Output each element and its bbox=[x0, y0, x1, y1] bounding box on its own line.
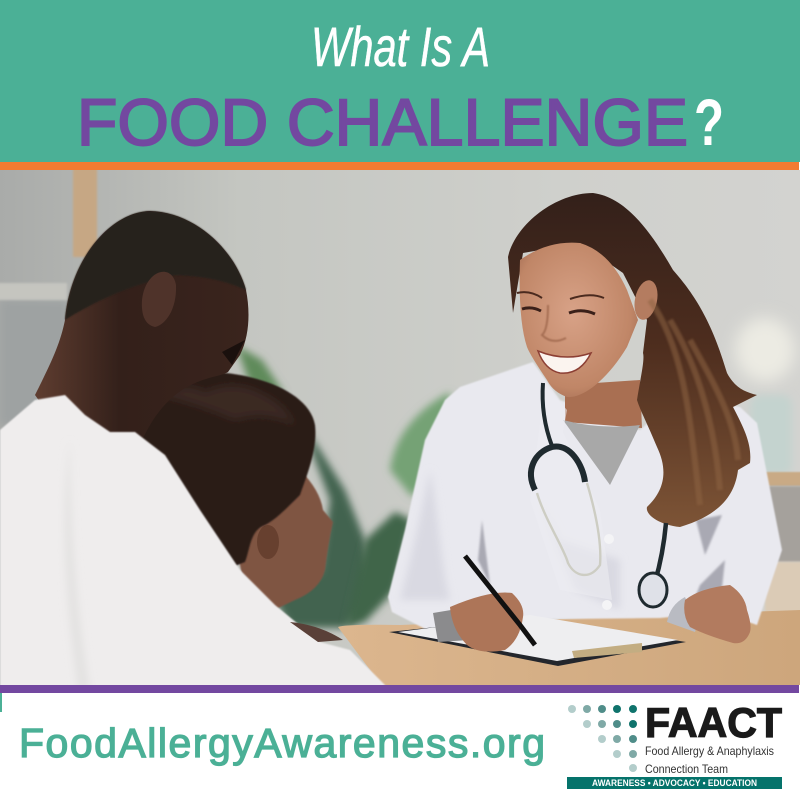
coat buttons bbox=[604, 534, 614, 544]
eye bbox=[222, 340, 245, 365]
short hair bbox=[65, 211, 246, 320]
grey undershirt bbox=[563, 420, 640, 485]
table bbox=[338, 610, 800, 690]
neck bbox=[565, 380, 642, 428]
logo name line 1: Food Allergy & Anaphylaxis bbox=[645, 744, 774, 758]
FAACT logo bbox=[567, 699, 782, 789]
smile bbox=[538, 351, 591, 373]
stethoscope bbox=[531, 383, 667, 607]
child bbox=[135, 372, 333, 612]
blurred room background bbox=[0, 165, 800, 685]
lab coat bbox=[388, 362, 782, 633]
doctor left hand and cuff bbox=[667, 585, 751, 643]
coat button lower bbox=[602, 600, 612, 610]
header band bbox=[0, 0, 800, 162]
flowers and shelf at right bbox=[735, 318, 800, 614]
child's shoulder under the arm bbox=[290, 622, 343, 642]
child ear bbox=[257, 525, 279, 559]
white shirt bbox=[0, 395, 385, 690]
logo tagline: AWARENESS • ADVOCACY • EDUCATION bbox=[592, 778, 757, 788]
purple divider bbox=[0, 685, 799, 693]
doctor writing hand with pen bbox=[433, 556, 535, 652]
logo tagline bar bbox=[567, 777, 782, 789]
website url: FoodAllergyAwareness.org bbox=[19, 720, 545, 766]
father bbox=[0, 211, 385, 690]
logo dot pattern bbox=[568, 705, 637, 772]
clipboard with paper bbox=[389, 615, 686, 666]
coat lapels bbox=[561, 408, 612, 600]
title question mark: ? bbox=[694, 85, 724, 159]
face bbox=[520, 243, 638, 397]
orange divider bbox=[0, 162, 799, 170]
logo wordmark: FAACT bbox=[645, 699, 782, 746]
ear bbox=[142, 272, 176, 327]
head and neck bbox=[35, 211, 248, 445]
title line: Food Challenge?: FOOD CHALLENGE bbox=[77, 85, 688, 159]
title line: What Is A: What Is A bbox=[311, 15, 490, 78]
eyes and brows bbox=[517, 292, 604, 299]
nose shadow bbox=[542, 305, 566, 341]
ear bbox=[634, 280, 658, 320]
photo: father and child with doctor bbox=[0, 165, 800, 690]
blurred plants bbox=[236, 345, 450, 628]
child hair bbox=[135, 372, 315, 570]
logo name line 2: Connection Team bbox=[645, 762, 728, 776]
hair bbox=[508, 193, 757, 527]
child face bbox=[239, 476, 334, 608]
hair strands overlay bbox=[650, 300, 738, 505]
doctor bbox=[388, 193, 782, 633]
white footer edge accent bbox=[0, 693, 2, 712]
